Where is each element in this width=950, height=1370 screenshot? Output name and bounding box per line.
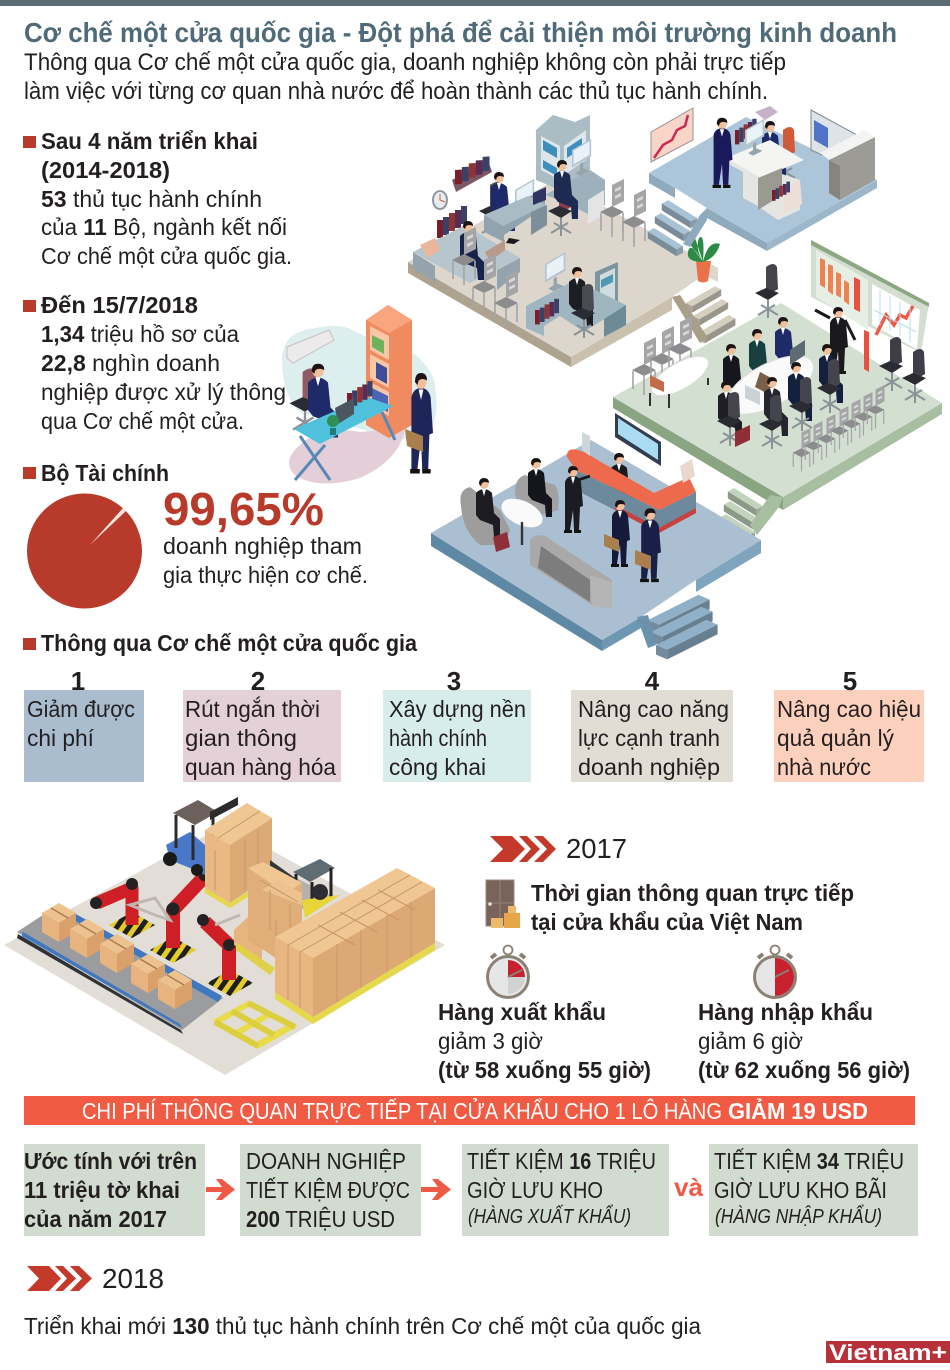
stairs beige (672, 286, 735, 343)
import stats: Hàng nhập khẩu (698, 999, 873, 1025)
intro text (24, 49, 786, 105)
panel: sau 4 năm triển khai: Cơ chế một cửa quốc gia. (41, 243, 292, 269)
box: tiết kiệm 16: GIỜ LƯU KHO (467, 1177, 603, 1203)
benefit 1: Giảm được (27, 696, 135, 722)
benefit 1 (24, 666, 144, 782)
benefit 1: 1 (71, 666, 85, 696)
small table with chairs (632, 337, 656, 395)
panel: đến 15/7/2018: 22,8 nghìn doanh (41, 350, 220, 376)
export stats: giảm 3 giờ (438, 1028, 543, 1054)
panel: sau 4 năm triển khai: của 11 Bộ, ngành kết nối (41, 214, 287, 240)
bookcase (536, 115, 590, 190)
export stats: Hàng xuất khẩu (438, 999, 606, 1025)
wall with charts (811, 240, 929, 372)
benefit 2: quan hàng hóa (185, 754, 336, 780)
benefit 4: lực cạnh tranh (578, 725, 720, 751)
wall books (735, 119, 757, 144)
blue forklift (163, 797, 238, 876)
panel: bộ tài chính: Bộ Tài chính (41, 460, 169, 486)
box: tiết kiệm 16: TIẾT KIỆM 16 TRIỆU (467, 1147, 656, 1174)
panel: đến 15/7/2018: Đến 15/7/2018 (41, 292, 198, 318)
clock (433, 191, 447, 209)
benefit 5: quả quản lý (777, 725, 894, 751)
yellow pallet (213, 1001, 297, 1049)
illustration: plant (688, 237, 720, 282)
icon: stopwatch import (754, 946, 796, 998)
robot arms (90, 868, 253, 996)
benefit 3: công khai (389, 754, 486, 780)
benefit 4: 4 (645, 666, 660, 696)
export stats: (từ 58 xuống 55 giờ) (438, 1057, 651, 1083)
benefit 2: 2 (251, 666, 265, 696)
connector và: và (674, 1174, 703, 1202)
panel: sau 4 năm triển khai: (2014-2018) (41, 157, 170, 183)
benefit 4 (571, 666, 733, 782)
top bar (0, 0, 950, 6)
logo vietnam+: Vietnam+ (829, 1340, 947, 1365)
export stats (438, 999, 651, 1083)
year 2018: 2018 (102, 1263, 164, 1294)
sofa (530, 535, 612, 608)
box: doanh nghiệp: TIẾT KIỆM ĐƯỢC (246, 1176, 410, 1203)
benefit 2: Rút ngắn thời (185, 696, 320, 722)
red banner: CHI PHÍ THÔNG QUAN TRỰC TIẾP TẠI CỬA KHẨU CHO 1 LÔ HÀNG (82, 1096, 722, 1124)
benefit 3 (383, 666, 531, 782)
intro text: làm việc với từng cơ quan nhà nước để hoàn thành các thủ tục hành chính. (24, 78, 768, 105)
pie chart 99,65% (27, 494, 142, 608)
box: tiết kiệm 34: GIỜ LƯU KHO BÃI (714, 1177, 887, 1203)
panel: đến 15/7/2018: 1,34 triệu hồ sơ của (41, 321, 239, 347)
illustration: person at desk with bookcase (282, 305, 437, 484)
illustration: meeting room (613, 240, 942, 542)
arrow 1 (206, 1179, 235, 1200)
heading: thời gian thông quan (531, 880, 854, 935)
big number: 99,65% (163, 483, 324, 535)
panel: sau 4 năm triển khai: Sau 4 năm triển khai (41, 128, 258, 154)
illustration: open office room (408, 115, 735, 367)
benefit 4: Nâng cao năng (578, 696, 729, 722)
coffee table (497, 493, 547, 545)
front desk (545, 252, 565, 291)
icon: stopwatch export (488, 946, 528, 998)
receptionist (611, 453, 635, 512)
panel: bộ tài chính: doanh nghiệp tham (163, 533, 362, 559)
text: triển khai mới: Triển khai mới 130 thủ tục hành chính trên Cơ chế một của quốc gia (24, 1313, 701, 1339)
benefit 4: doanh nghiệp (578, 754, 720, 780)
tall pallet stack (205, 803, 272, 908)
stairs green (720, 488, 783, 542)
tv (615, 413, 661, 466)
second forklift (270, 859, 340, 918)
benefit 3: Xây dựng nền (389, 696, 526, 722)
intro text: Thông qua Cơ chế một cửa quốc gia, doanh nghiệp không còn phải trực tiếp (24, 49, 786, 76)
left desk (437, 206, 467, 238)
benefit 2 (183, 666, 341, 782)
box: tiết kiệm 34: (HÀNG NHẬP KHẨU) (715, 1205, 882, 1228)
title: Cơ chế một cửa quốc gia - Đột phá để cải thiện môi trường kinh doanh (24, 17, 897, 48)
illustration: warehouse (4, 797, 445, 1075)
box: ước tính (24, 1144, 205, 1236)
box: tiết kiệm 34 (709, 1144, 918, 1236)
box: ước tính: của năm 2017 (24, 1206, 167, 1232)
benefit 1: chi phí (27, 725, 95, 751)
reception desk (567, 432, 696, 533)
heading: thời gian thông quan: Thời gian thông quan trực tiếp (531, 880, 854, 906)
middle pallet stack (234, 862, 302, 975)
panel: bộ tài chính: gia thực hiện cơ chế. (163, 562, 368, 588)
panel: sau 4 năm triển khai: 53 thủ tục hành chính (41, 186, 262, 212)
wall poster chart (651, 108, 693, 162)
panel heading: thông qua: Thông qua Cơ chế một cửa quốc gia (41, 630, 417, 656)
benefit 5: 5 (843, 666, 857, 696)
illustration: reception room (431, 413, 761, 659)
panel: sau 4 năm triển khai (23, 128, 292, 269)
box: doanh nghiệp: DOANH NGHIỆP (246, 1148, 406, 1174)
icon: door with boxes (486, 880, 520, 928)
benefit 3: 3 (447, 666, 461, 696)
box: ước tính: Ước tính với trên (24, 1148, 197, 1174)
heading: thời gian thông quan: tại cửa khẩu của Việt Nam (531, 909, 803, 935)
illustration: manager room (648, 106, 877, 256)
armchairs (460, 458, 559, 545)
panel: đến 15/7/2018: qua Cơ chế một cửa. (41, 408, 244, 434)
stairs blue (637, 595, 718, 659)
benefit 2: gian thông (185, 725, 297, 751)
panel: bộ tài chính (23, 460, 368, 608)
chevrons 2018 (27, 1266, 92, 1291)
import stats: giảm 6 giờ (698, 1028, 803, 1054)
year 2017: 2017 (566, 833, 627, 864)
box: tiết kiệm 34: TIẾT KIỆM 34 TRIỆU (714, 1147, 904, 1174)
import stats (698, 999, 910, 1083)
import stats: (từ 62 xuống 56 giờ) (698, 1057, 910, 1083)
arrow 2 (421, 1179, 451, 1200)
shelf and wall (811, 110, 857, 155)
benefit 5 (774, 666, 924, 782)
box: ước tính: 11 triệu tờ khai (24, 1177, 180, 1203)
panel: đến 15/7/2018 (23, 292, 286, 434)
chevrons 2017 (490, 836, 556, 862)
box: tiết kiệm 16: (HÀNG XUẤT KHẨU) (468, 1204, 631, 1228)
row of chairs (792, 385, 884, 472)
red banner: GIẢM 19 USD (728, 1096, 868, 1124)
benefit 5: nhà nước (777, 754, 871, 780)
box: doanh nghiệp: 200 TRIỆU USD (246, 1206, 395, 1232)
stairs blue (648, 200, 707, 256)
panel: đến 15/7/2018: nghiệp được xử lý thông (41, 379, 286, 405)
box: doanh nghiệp (240, 1144, 421, 1236)
big pallet stack (275, 868, 435, 1024)
box: tiết kiệm 16 (462, 1144, 669, 1236)
conveyor (17, 903, 223, 1034)
benefit 3: hành chính (389, 725, 487, 751)
benefit 5: Nâng cao hiệu (777, 696, 921, 722)
meeting table and people (723, 344, 747, 403)
wall shelf (452, 160, 492, 192)
